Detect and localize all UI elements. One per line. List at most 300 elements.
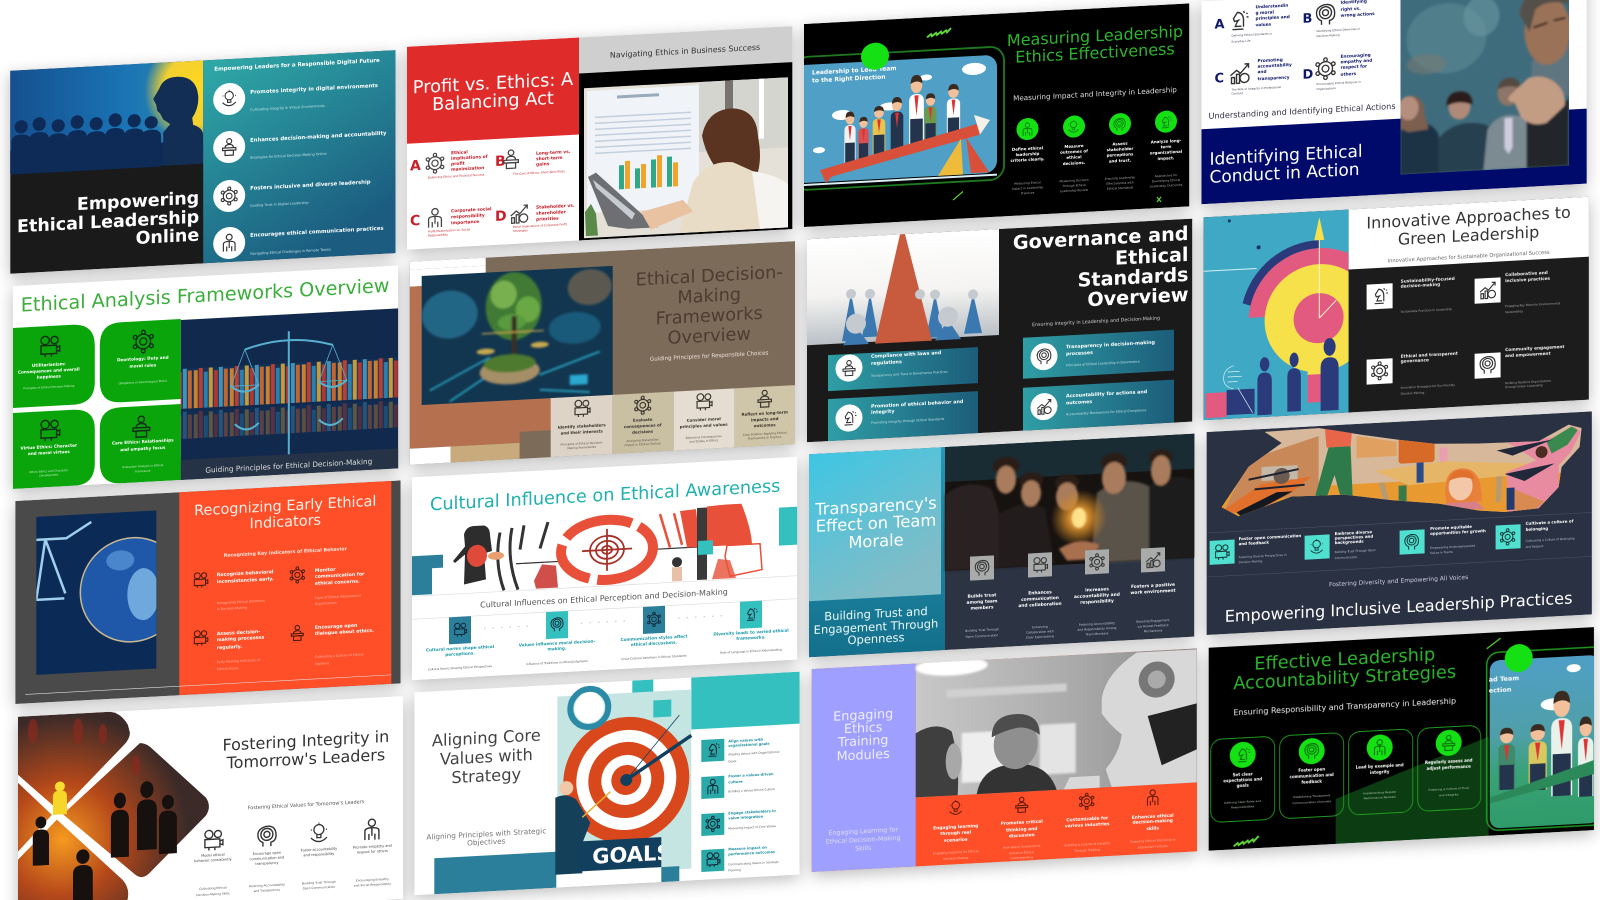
- timeline: four cultural influences: Influence of Traditions on Moral Judgments: [526, 659, 588, 666]
- subtitle: [426, 826, 546, 850]
- slide: Governance and Ethical Standards Overview: [807, 219, 1192, 442]
- subtitle: Fostering Ethical Values for Tomorrow's Leaders: [248, 799, 365, 811]
- title: Indicators: [250, 513, 321, 532]
- metrics row: Quantifying Ethical: [1152, 178, 1180, 183]
- items: four indicators: Assess decision-: [217, 629, 260, 637]
- metrics row: Practices: [1021, 191, 1035, 195]
- panel: four ethical actions: Identifying Ethical Dilemmas in: [1316, 27, 1360, 33]
- panel: four ethical actions: and: [1258, 69, 1267, 75]
- items: four morale outcomes: Open Communication: [966, 633, 998, 639]
- items: four indicators: Signs of Ethical Awareness in: [315, 593, 361, 600]
- illustration: leadership team on boat: [794, 36, 1004, 191]
- timeline: four cultural influences: Values influence moral decision-: [519, 638, 595, 648]
- metrics row: Measuring Decision: [1059, 178, 1089, 183]
- panel: lavender title: Ethics: [844, 720, 883, 737]
- illustration: cropped team image: ad Team: [1489, 674, 1519, 684]
- panel: four framework tiles: Evaluation Analysis in Ethical: [122, 463, 163, 469]
- title: [432, 726, 541, 788]
- title: Making: [677, 285, 741, 308]
- timeline: four cultural influences: perceptions.: [445, 650, 475, 657]
- items: four morale outcomes: Building Trust Through: [965, 627, 999, 633]
- cards: four accountability strategies: integrity: [1370, 769, 1390, 775]
- items: four integrity values: and Social Responsibility: [354, 882, 391, 888]
- items: four training benefits: Engaging Learning for Ethical: [933, 849, 979, 856]
- panel: four ethical actions: B: [1303, 11, 1312, 27]
- subtitle: Objectives: [467, 836, 506, 847]
- items: four inclusive practices: Fostering Diverse Perspectives in: [1239, 553, 1287, 559]
- subtitle: Ensuring Integrity in Leadership and Decision-Making: [1032, 315, 1160, 328]
- title: Accountability Strategies: [1233, 661, 1456, 694]
- subtitle: Guiding Principles for Responsible Choices: [650, 351, 769, 363]
- items: four inclusive practices: Cultivate a culture of: [1526, 518, 1574, 526]
- panel: navy title band: Identifying Ethical: [1210, 142, 1363, 170]
- card row: four decision steps: Making Frameworks: [567, 445, 597, 450]
- panel: four ethical actions: right vs.: [1341, 6, 1361, 13]
- metrics row: Define ethical: [1012, 145, 1044, 152]
- panel: four considerations: shareholder: [536, 209, 567, 217]
- panel: red title: Balancing Act: [432, 88, 554, 115]
- items: four strategic alignment steps: [701, 736, 780, 874]
- panel: four considerations: Strategies: [513, 228, 528, 233]
- panel: lavender title: [812, 663, 916, 872]
- card row: four decision steps: consequences of: [624, 422, 662, 429]
- title: Frameworks: [656, 304, 763, 330]
- items: four inclusive practices: belonging: [1526, 526, 1548, 532]
- subtitle: Recognizing Key Indicators of Ethical Behavior: [224, 546, 348, 559]
- items: four morale outcomes: accountability and: [1074, 592, 1120, 600]
- items: four integrity values: Foster accountability: [301, 847, 337, 853]
- slide: Empowering Ethical Leadership Online: [10, 50, 395, 274]
- card row: four decision steps: Evaluate: [633, 417, 653, 423]
- card row: four decision steps: and their interests: [561, 428, 603, 436]
- items: four morale outcomes: via Honest Feedback: [1137, 623, 1169, 629]
- items: four inclusive practices: Building Trust Through Open: [1335, 548, 1376, 554]
- cards: four accountability strategies: Fostering a Culture of Trust: [1428, 786, 1470, 792]
- cards: four accountability strategies: Regularly assess and: [1425, 758, 1473, 765]
- panel: teal title: Transparency's: [814, 493, 937, 519]
- panel: key points: Enhances decision-making and accountability: [250, 131, 387, 144]
- items: four training benefits: Customizable for: [1066, 815, 1109, 823]
- items: four inclusive practices: backgrounds: [1335, 539, 1364, 545]
- items: four inclusive practices: and feedback: [1239, 540, 1269, 546]
- items: four training benefits: Enhance Ethical: [1009, 850, 1034, 855]
- metrics row: decisions.: [1063, 160, 1086, 166]
- dark green floor panel: [1336, 737, 1489, 844]
- title: Fostering Integrity in: [223, 727, 389, 755]
- cards: four accountability strategies: communication and: [1290, 772, 1334, 779]
- metrics row: outcomes of: [1060, 148, 1088, 155]
- cards: four governance themes: Compliance with laws and: [871, 350, 942, 360]
- items: four strategic alignment steps: value integration: [728, 815, 764, 821]
- items: four training benefits: Interactive Formats: [1138, 844, 1168, 850]
- items: four morale outcomes: Fostering Accountability: [1079, 621, 1115, 627]
- panel: four considerations: Corporate social: [451, 206, 492, 214]
- items: four morale outcomes: Enhances: [1028, 589, 1052, 597]
- title: [1008, 25, 1182, 63]
- photo: globe and scales: [36, 509, 184, 675]
- photo: team around a glowing bulb: [945, 434, 1195, 571]
- illustration: leadership team on boat: to the Right Direction: [812, 74, 885, 85]
- panel: four framework tiles: Utilitarianism:: [32, 361, 66, 368]
- panel: four considerations: The Cost of Ethics: Short-Term Risks: [512, 169, 565, 176]
- panel: four considerations: profit: [451, 161, 465, 167]
- items: four indicators: Cultivating a Culture of Ethical: [315, 652, 364, 659]
- illustration: scales of justice above crowd: [181, 308, 399, 480]
- panel: four ethical actions: Encouraging Ethical Behavior in: [1316, 80, 1361, 86]
- items: four morale outcomes: Boosting Engagement: [1136, 618, 1170, 624]
- items: four indicators: Ethical Issues: [217, 666, 239, 671]
- rule lines: [1207, 512, 1592, 577]
- panel: four ethical actions: Defining Ethical Standards in: [1232, 32, 1272, 38]
- metrics row: Leadership Review: [1060, 188, 1089, 193]
- items: four integrity values: Cultivating Ethical: [199, 886, 227, 891]
- panel: key points: Promotes integrity in digital environments: [250, 83, 378, 96]
- cards: four accountability strategies: Lead by example and: [1356, 762, 1404, 770]
- items: four indicators: regularly.: [217, 644, 242, 651]
- panel: four considerations: Balancing Ethics and Financial Success: [428, 173, 485, 180]
- panel: key points: Empowering Leaders for a Responsible Digital Future: [214, 58, 380, 73]
- panel: four considerations: responsibility: [451, 213, 485, 220]
- metrics row: [1010, 110, 1183, 196]
- panel: four framework tiles: Principles of Ethical Decision-Making: [23, 384, 75, 390]
- cards: four governance themes: Principles of Ethical Leadership in Governance: [1066, 359, 1140, 367]
- items: four morale outcomes: responsibility: [1080, 598, 1114, 606]
- metrics row: Impact in Leadership: [1012, 185, 1043, 191]
- items: four morale outcomes: Team Members: [1085, 631, 1109, 637]
- panel: key points: Guiding Trust in Digital Leadership: [250, 201, 309, 208]
- illustration: diverse team at a table: [1217, 412, 1587, 531]
- items: four morale outcomes: and collaboration: [1018, 601, 1062, 609]
- subtitle: Measuring Impact and Integrity in Leadership: [1013, 85, 1177, 103]
- slide: Profit vs. Ethics: [407, 26, 793, 250]
- slide: Measuring Leadership Ethics Effectiveness: [794, 3, 1189, 228]
- items: four training benefits: Enhances ethical: [1132, 813, 1174, 821]
- items: four inclusive practices: Promote equitable: [1430, 524, 1472, 531]
- slide: Transparency's Effect on Team Morale: [809, 434, 1195, 657]
- items: four training benefits: discussion: [1009, 832, 1035, 839]
- title: Overview: [1087, 283, 1189, 311]
- panel: four ethical actions: Organizations: [1316, 86, 1336, 91]
- title: Empowering: [77, 189, 199, 215]
- cards: four accountability strategies: goals: [1237, 783, 1249, 788]
- cards: four accountability strategies: expectations and: [1223, 776, 1262, 783]
- panel: red title: [407, 37, 579, 144]
- items: four integrity values: transparency: [255, 861, 278, 866]
- items: four strategic alignment steps: culture: [728, 780, 743, 785]
- metrics row: stakeholder: [1107, 146, 1133, 152]
- title: Tomorrow's Leaders: [226, 745, 385, 773]
- panel: four ethical actions: D: [1303, 67, 1313, 83]
- cards: four governance themes: Transparency and Trust in Governance Practices: [870, 370, 948, 378]
- panel: four framework tiles: Consequences and overall: [18, 366, 80, 375]
- panel: four framework tiles: moral rules: [129, 362, 157, 369]
- illustration: leader and crowd: [10, 60, 203, 175]
- items: four green leadership practices: Community engagement: [1505, 344, 1565, 353]
- items: four indicators: in Decision-Making: [217, 606, 247, 611]
- items: four integrity values: Decision-Making Skills: [196, 891, 230, 897]
- card row: four decision steps: [551, 385, 796, 457]
- metrics row: Approaches for: [1155, 173, 1178, 178]
- items: four integrity values: communication and: [250, 855, 284, 861]
- items: four training benefits: Decision-Making: [943, 856, 968, 861]
- timeline: four cultural influences: Cross-Cultural Variations in Ethical Standards: [621, 654, 687, 661]
- panel: four framework tiles: Care Ethics: Relationships: [112, 437, 174, 446]
- timeline: four cultural influences: ethical discussions.: [631, 640, 677, 647]
- items: four indicators: communication for: [315, 571, 365, 580]
- title: [194, 494, 376, 535]
- cards: four governance themes: integrity: [871, 409, 895, 416]
- panel: key points: Navigating Ethical Challenges in Remote Teams: [250, 248, 331, 256]
- rule lines: [412, 576, 797, 619]
- panel: teal title: Building Trust and: [824, 604, 928, 623]
- panel: lavender title: Engaging: [833, 707, 893, 725]
- decorative colour blocks: [410, 254, 552, 465]
- panel: four framework tiles: Framework: [135, 469, 151, 473]
- card row: four decision steps: Analyzing Stakeholder: [627, 437, 660, 443]
- illustration: goals target with arrow: GOALS: [592, 840, 672, 869]
- panel: teal title: Effect on Team: [816, 511, 936, 536]
- cards: four accountability strategies: Set clear: [1233, 771, 1253, 777]
- items: four green leadership practices: Collaborative and: [1505, 270, 1548, 278]
- illustration: cropped team image: [1487, 639, 1600, 831]
- items: four indicators: making processes: [217, 635, 264, 643]
- panel: four ethical actions: others: [1341, 71, 1357, 78]
- card row: four decision steps: Impact in Ethical Choices: [624, 441, 661, 447]
- items: four indicators: Recognizing Ethical Dilemmas: [217, 599, 265, 605]
- subtitle: Understanding and Identifying Ethical Actions: [1208, 101, 1396, 121]
- items: four integrity values: Model ethical: [201, 853, 225, 858]
- title: Ethical Decision-: [636, 263, 783, 291]
- card row: four decision steps: principles and values: [680, 422, 728, 429]
- cards: four governance themes: Transparency in decision-making: [1066, 340, 1155, 350]
- panel: four considerations: [410, 144, 575, 239]
- items: four morale outcomes: Builds trust: [968, 592, 996, 600]
- photo: red cone and blue pawns: [807, 229, 999, 347]
- decorative accents: [926, 28, 1162, 202]
- cards: four governance themes: Promotion of ethical behavior and: [871, 399, 964, 410]
- items: four indicators: dialogue about ethics.: [315, 628, 374, 637]
- items: four green leadership practices: Innovative Strategies for Eco-Friendly: [1401, 383, 1455, 390]
- panel: four considerations: C: [410, 213, 420, 230]
- panel: subtitle band: [579, 26, 793, 73]
- timeline: four cultural influences: Cultural norms shape ethical: [426, 644, 495, 653]
- items: four morale outcomes: communication: [1021, 595, 1059, 603]
- panel: four ethical actions: Conduct: [1232, 91, 1244, 96]
- timeline: four cultural influences: [426, 599, 789, 672]
- photo: tree and scales on circuit board: [422, 266, 613, 405]
- metrics row: Measuring Ethical: [1014, 180, 1041, 186]
- items: four integrity values: behavior consistently: [194, 857, 232, 863]
- items: four green leadership practices: Sustainability-focused: [1401, 276, 1455, 285]
- items: four green leadership practices: Sustainable Practices in Leadership: [1401, 307, 1452, 314]
- title: Effective Leadership: [1254, 644, 1435, 675]
- panel: teal title: [809, 447, 945, 657]
- panel: four considerations: Long-term vs.: [536, 149, 571, 157]
- slide: Empowering Inclusive Leadership Practices: [1207, 411, 1592, 635]
- subtitle: Ensuring Responsibility and Transparency in Leadership: [1233, 696, 1456, 717]
- items: four morale outcomes: Increases: [1085, 586, 1109, 594]
- panel: subtitle band: Navigating Ethics in Business Success: [610, 43, 760, 60]
- items: four green leadership practices: Building Resilient Organizations: [1505, 379, 1551, 385]
- items: four strategic alignment steps: Goals: [728, 759, 737, 764]
- items: four inclusive practices: Voices in Teams: [1430, 550, 1453, 555]
- items: four inclusive practices: Communication: [1335, 555, 1358, 560]
- items: four morale outcomes: [965, 546, 1176, 643]
- card row: four decision steps: Frameworks in Practice: [748, 435, 782, 441]
- panel: four considerations: gains: [536, 161, 550, 168]
- panel: four ethical actions: empathy and: [1341, 58, 1372, 65]
- panel: four considerations: importance: [451, 219, 479, 226]
- panel: four framework tiles: Deontology: Duty and: [117, 355, 169, 362]
- items: four training benefits: Fostering Ethical Discourse in: [1130, 838, 1176, 844]
- items: four morale outcomes: Mechanisms: [1144, 628, 1163, 633]
- items: four morale outcomes: members: [970, 604, 994, 612]
- title: Ethical: [1115, 243, 1188, 270]
- panel: four framework tiles: and empathy focus: [120, 445, 166, 452]
- items: four strategic alignment steps: Engage stakeholders in: [728, 809, 776, 816]
- items: four inclusive practices: opportunities for growth: [1430, 528, 1486, 536]
- timeline: four cultural influences: Communication styles affect: [620, 634, 688, 642]
- items: four training benefits: decision-making: [1132, 818, 1173, 826]
- items: four green leadership practices: decision-making: [1401, 282, 1440, 290]
- panel: lavender title: Skills: [855, 845, 871, 853]
- colour blocks: [434, 672, 800, 894]
- panel: four ethical actions: The Role of Integrity in Professional: [1231, 85, 1281, 92]
- slide: Engaging Ethics Training Modules: [812, 644, 1197, 872]
- items: four green leadership practices: governance: [1401, 357, 1429, 365]
- items: four indicators: inconsistencies early.: [217, 576, 274, 585]
- panel: lavender title: Modules: [837, 747, 890, 765]
- timeline: four cultural influences: Cultural Norms Shaping Ethical Perspectives: [428, 664, 493, 671]
- photo: people with a robot: [916, 644, 1197, 797]
- panel: four considerations: implications of: [451, 154, 488, 162]
- panel: four considerations: Moral Implications of Corporate Profit: [513, 222, 568, 229]
- title: Values with: [440, 745, 533, 769]
- panel: key points: Cultivating Integrity in Virtual Environments: [250, 104, 325, 112]
- items: four training benefits: thinking and: [1006, 826, 1037, 834]
- illustration: cropped team image: ection: [1489, 685, 1512, 695]
- items: four green leadership practices: inclusive practices: [1505, 276, 1551, 284]
- slide: Identifying Ethical Conduct in Action: [1202, 0, 1587, 204]
- panel: four framework tiles: and moral virtues: [28, 449, 70, 456]
- items: four integrity values: Open Communication: [303, 885, 335, 890]
- items: four strategic alignment steps: Communicating Values in Strategic: [728, 860, 779, 867]
- cards: four accountability strategies: Establishing Transparent: [1293, 793, 1331, 799]
- items: four green leadership practices: Stewardship: [1505, 309, 1523, 314]
- card row: four decision steps: impacts and: [751, 416, 779, 422]
- items: four morale outcomes: Enhancing: [1032, 625, 1048, 629]
- cards: four accountability strategies: Communication Channels: [1292, 799, 1331, 805]
- panel: four ethical actions: g moral: [1256, 9, 1275, 16]
- items: four green leadership practices: [1367, 269, 1565, 398]
- metrics row: and trust.: [1109, 157, 1132, 164]
- panel: four ethical actions: transparency: [1258, 75, 1290, 82]
- items: four indicators: Organizations: [315, 601, 337, 606]
- slide: Innovative Approaches to Green Leadership: [1204, 197, 1590, 420]
- items: four integrity values: and Transparency: [254, 888, 280, 893]
- card row: four decision steps: and Duties in Ethics: [689, 438, 719, 444]
- items: four indicators: ethical concerns.: [315, 579, 360, 587]
- metrics row: Leadership Outcomes: [1150, 183, 1183, 189]
- card row: four decision steps: Balancing Consequences: [686, 434, 722, 440]
- items: four training benefits: [933, 788, 1176, 865]
- metrics row: Effectiveness with: [1106, 180, 1134, 186]
- timeline: four cultural influences: making.: [548, 646, 567, 652]
- metrics row: perceptions: [1107, 151, 1134, 158]
- items: four morale outcomes: and Responsibility Among: [1078, 626, 1117, 632]
- illustration: maze and target: [412, 500, 798, 595]
- title: [1014, 225, 1188, 306]
- cards: four governance themes: Accountability for actions and: [1066, 389, 1148, 399]
- panel: key points: Fosters inclusive and diverse leadership: [250, 179, 371, 192]
- items: four training benefits: various industries: [1065, 821, 1110, 829]
- items: four green leadership practices: and empowerment: [1505, 351, 1551, 359]
- metrics row: Measure: [1064, 143, 1084, 149]
- panel: lavender title: Ethical Decision-Making: [826, 835, 901, 846]
- panel: teal title: Engagement Through: [814, 616, 938, 637]
- panel: four considerations: Stakeholder vs.: [536, 203, 575, 211]
- cards: four accountability strategies: Defining Clear Roles and: [1224, 799, 1261, 805]
- items: four inclusive practices: perspectives and: [1335, 534, 1373, 541]
- items: four integrity values: and responsibility: [303, 852, 334, 857]
- slide: Aligning Core Values with Strategy: [414, 672, 800, 895]
- cards: four accountability strategies: Implementing Regular: [1363, 790, 1397, 795]
- metrics row: ethical: [1066, 154, 1082, 160]
- items: four training benefits: skills: [1146, 825, 1159, 832]
- panel: four ethical actions: Everyday Life: [1232, 39, 1251, 44]
- subtitle: Cultural Influences on Ethical Perception and Decision-Making: [480, 587, 728, 610]
- slide: Ethical Analysis Frameworks Overview: [13, 265, 399, 489]
- items: four strategic alignment steps: performance outcomes: [728, 850, 775, 857]
- timeline: four cultural influences: Diversity leads to varied ethical: [713, 628, 789, 637]
- title: [223, 727, 389, 773]
- cards: four governance themes: Accountability Mechanisms for Ethical Compliance: [1066, 408, 1146, 416]
- panel: four ethical actions: wrong actions: [1341, 11, 1375, 19]
- illustration: goals target with arrow: [555, 683, 691, 888]
- panel: four ethical actions: Understandin: [1256, 3, 1288, 10]
- card row: four decision steps: Consider moral: [687, 416, 721, 423]
- items: four indicators: Recognize behavioral: [217, 569, 274, 578]
- items: four strategic alignment steps: Aligning Values with Organizational: [728, 750, 780, 757]
- items: four integrity values: [194, 818, 392, 897]
- items: four strategic alignment steps: Measure impact on: [728, 845, 767, 852]
- illustration: scales of justice above crowd: Guiding Principles for Ethical Decision-Making: [205, 457, 372, 475]
- panel: four considerations: Profit Maximization vs. Social: [428, 227, 470, 234]
- items: four morale outcomes: Clear Expectations: [1026, 634, 1055, 640]
- items: four strategic alignment steps: Planning: [728, 868, 741, 873]
- panel: four framework tiles: happiness: [37, 373, 61, 380]
- items: four inclusive practices: Empowering Underrepresented: [1430, 544, 1475, 550]
- items: four inclusive practices: and Respect: [1526, 544, 1544, 549]
- items: four integrity values: Encouraging Empathy: [356, 877, 389, 883]
- items: four inclusive practices: [1210, 518, 1575, 567]
- panel: four ethical actions: Decision-Making: [1316, 33, 1340, 38]
- card row: four decision steps: Reflect on long-term: [742, 409, 788, 417]
- items: four inclusive practices: Foster open communication: [1239, 533, 1301, 541]
- illustration: target with arrow and figures: [1204, 210, 1349, 420]
- items: four integrity values: respect for others: [357, 849, 388, 855]
- accents: [1234, 638, 1501, 846]
- panel: four ethical actions: [1214, 0, 1375, 97]
- items: four indicators: Encourage open: [315, 623, 357, 631]
- items: four indicators: Monitor: [315, 567, 336, 574]
- cards: four accountability strategies: [1211, 725, 1481, 823]
- panel: navy title band: [1202, 109, 1587, 204]
- cards: four governance themes: [828, 330, 1174, 441]
- items: four morale outcomes: Fosters a positive: [1131, 582, 1175, 590]
- slide: Cultural Influence on Ethical Awareness: [412, 457, 798, 680]
- panel: four considerations: Ethical: [451, 149, 468, 156]
